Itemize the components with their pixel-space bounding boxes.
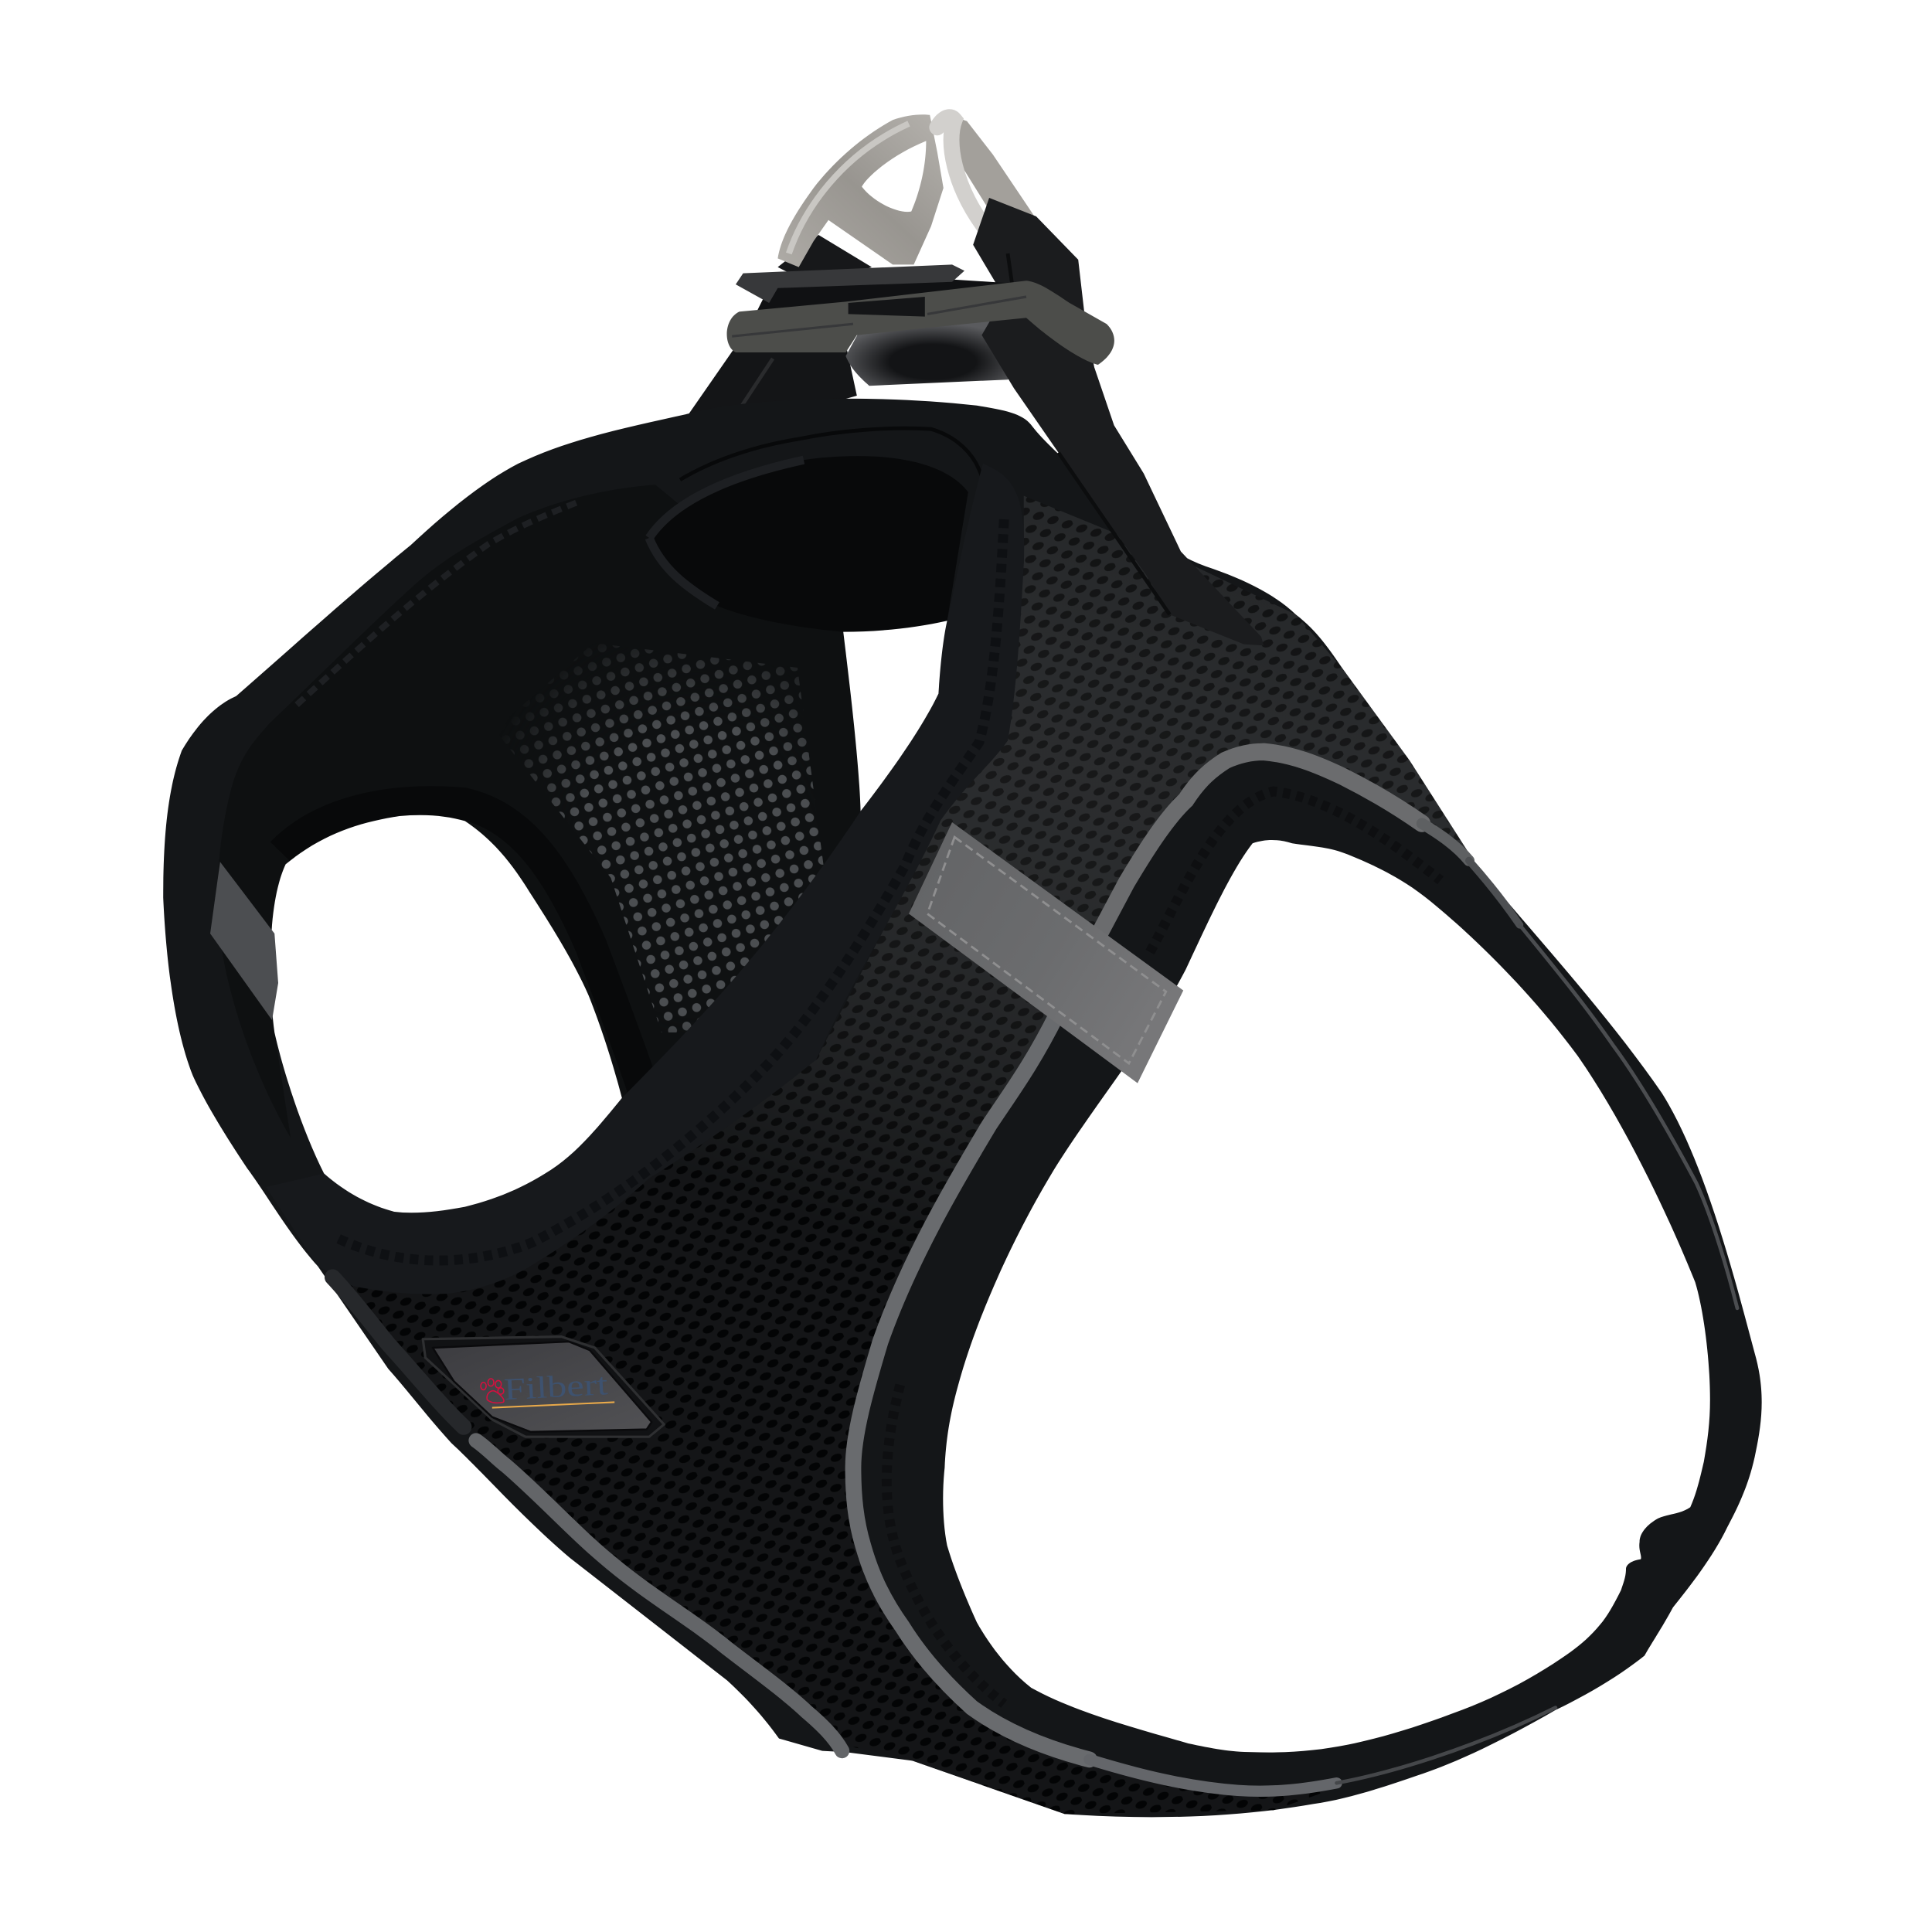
harness silhouette [163, 399, 1762, 1817]
metal D-ring [777, 114, 944, 267]
grey side tag [210, 862, 278, 1020]
buckle disc [845, 315, 1020, 386]
lining seam [297, 501, 581, 705]
leg opening [270, 815, 622, 1213]
buckle top plate [736, 264, 964, 303]
zigzag stitched band around chest opening [886, 791, 1440, 1704]
inner mesh lining with grey dots [495, 643, 828, 1032]
front edge binding [266, 464, 1024, 1294]
webbing behind the buckle [682, 235, 872, 423]
inner padded chest pad [649, 456, 968, 632]
inner lining [218, 485, 866, 1138]
product photo: black mesh dog harness [163, 109, 1762, 1818]
collar crease [680, 428, 988, 507]
second metal loop [937, 115, 1036, 225]
upper opening [843, 621, 947, 811]
chest opening [943, 840, 1710, 1753]
lower reflective edge strip [332, 1277, 842, 1751]
plastic side-release buckle [727, 281, 1114, 365]
logo wordmark: Filbert [503, 1366, 608, 1406]
buckle backing shadow [754, 280, 1029, 317]
dark binding around leg opening [282, 802, 643, 1088]
logo underline [492, 1402, 614, 1408]
outer mesh panel [332, 496, 1469, 1814]
reflective tab [909, 822, 1183, 1083]
logo paw icon [481, 1379, 504, 1403]
webbing strap [973, 198, 1264, 645]
logo patch [423, 1337, 664, 1437]
reflective piping along chest opening [853, 752, 1737, 1791]
